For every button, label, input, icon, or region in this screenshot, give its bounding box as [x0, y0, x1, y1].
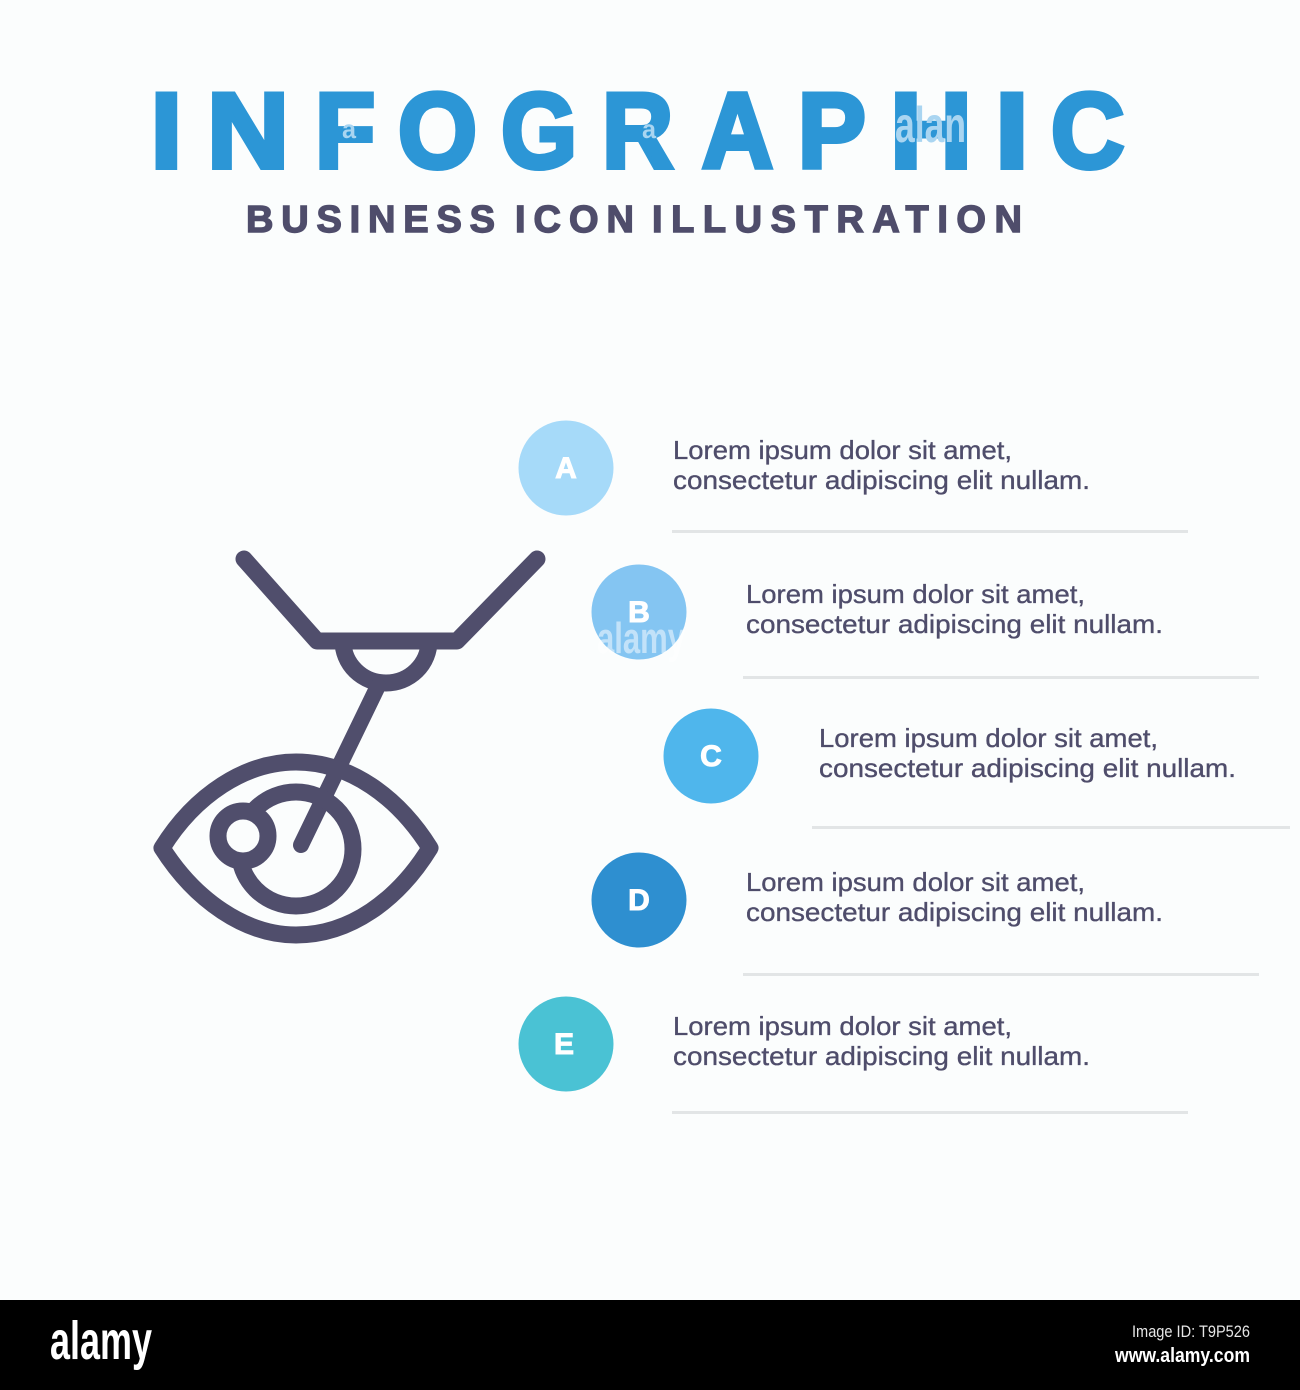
website: www.alamy.com — [1114, 1345, 1250, 1367]
title: F — [315, 70, 375, 190]
title — [151, 70, 1124, 190]
text C — [819, 723, 1236, 783]
badge E: E — [554, 1028, 574, 1061]
badge D — [592, 852, 686, 948]
badge C — [664, 708, 758, 804]
title: I — [151, 70, 182, 190]
badge A — [518, 420, 614, 516]
subtitle: ICON — [515, 199, 634, 241]
title watermarks: a — [342, 114, 357, 144]
alamy logo: alamy — [50, 1311, 152, 1371]
item C — [664, 708, 1290, 829]
title: H — [890, 70, 972, 190]
title: G — [501, 70, 577, 190]
title watermarks: a — [642, 114, 657, 144]
title: P — [798, 70, 866, 190]
text B — [746, 579, 1163, 639]
title: C — [1051, 70, 1124, 190]
text A: Lorem ipsum dolor sit amet, — [673, 435, 1012, 465]
badge E — [518, 996, 614, 1092]
item A — [518, 420, 1188, 533]
text D: consectetur adipiscing elit nullam. — [746, 897, 1163, 927]
text E: Lorem ipsum dolor sit amet, — [673, 1011, 1012, 1041]
title: R — [602, 70, 673, 190]
subtitle: ILLUSTRATION — [652, 199, 1022, 241]
item E — [518, 996, 1188, 1114]
text C: Lorem ipsum dolor sit amet, — [819, 723, 1158, 753]
item B — [592, 564, 1259, 679]
text E — [673, 1011, 1090, 1071]
title watermarks — [342, 97, 966, 153]
icon: eye with laser — [162, 559, 537, 935]
item D — [592, 852, 1259, 976]
subtitle — [246, 199, 1022, 241]
badge B: alamy — [597, 614, 685, 663]
title: I — [995, 70, 1029, 190]
badge B: B — [628, 596, 650, 629]
text E: consectetur adipiscing elit nullam. — [673, 1041, 1090, 1071]
footer bar — [0, 1300, 1300, 1390]
title: A — [702, 70, 773, 190]
image id: Image ID: T9P526 — [1132, 1322, 1250, 1341]
text B: consectetur adipiscing elit nullam. — [746, 609, 1163, 639]
text C: consectetur adipiscing elit nullam. — [819, 753, 1236, 783]
badge B — [592, 564, 686, 663]
title watermarks: alan — [895, 97, 966, 153]
text A: consectetur adipiscing elit nullam. — [673, 465, 1090, 495]
badge D: D — [628, 884, 650, 917]
title: O — [398, 70, 477, 190]
title: N — [207, 70, 289, 190]
badge C: C — [700, 740, 722, 773]
text D — [746, 867, 1163, 927]
badge A: A — [555, 452, 577, 485]
text B: Lorem ipsum dolor sit amet, — [746, 579, 1085, 609]
text A — [673, 435, 1090, 495]
subtitle: BUSINESS — [246, 199, 495, 241]
text D: Lorem ipsum dolor sit amet, — [746, 867, 1085, 897]
